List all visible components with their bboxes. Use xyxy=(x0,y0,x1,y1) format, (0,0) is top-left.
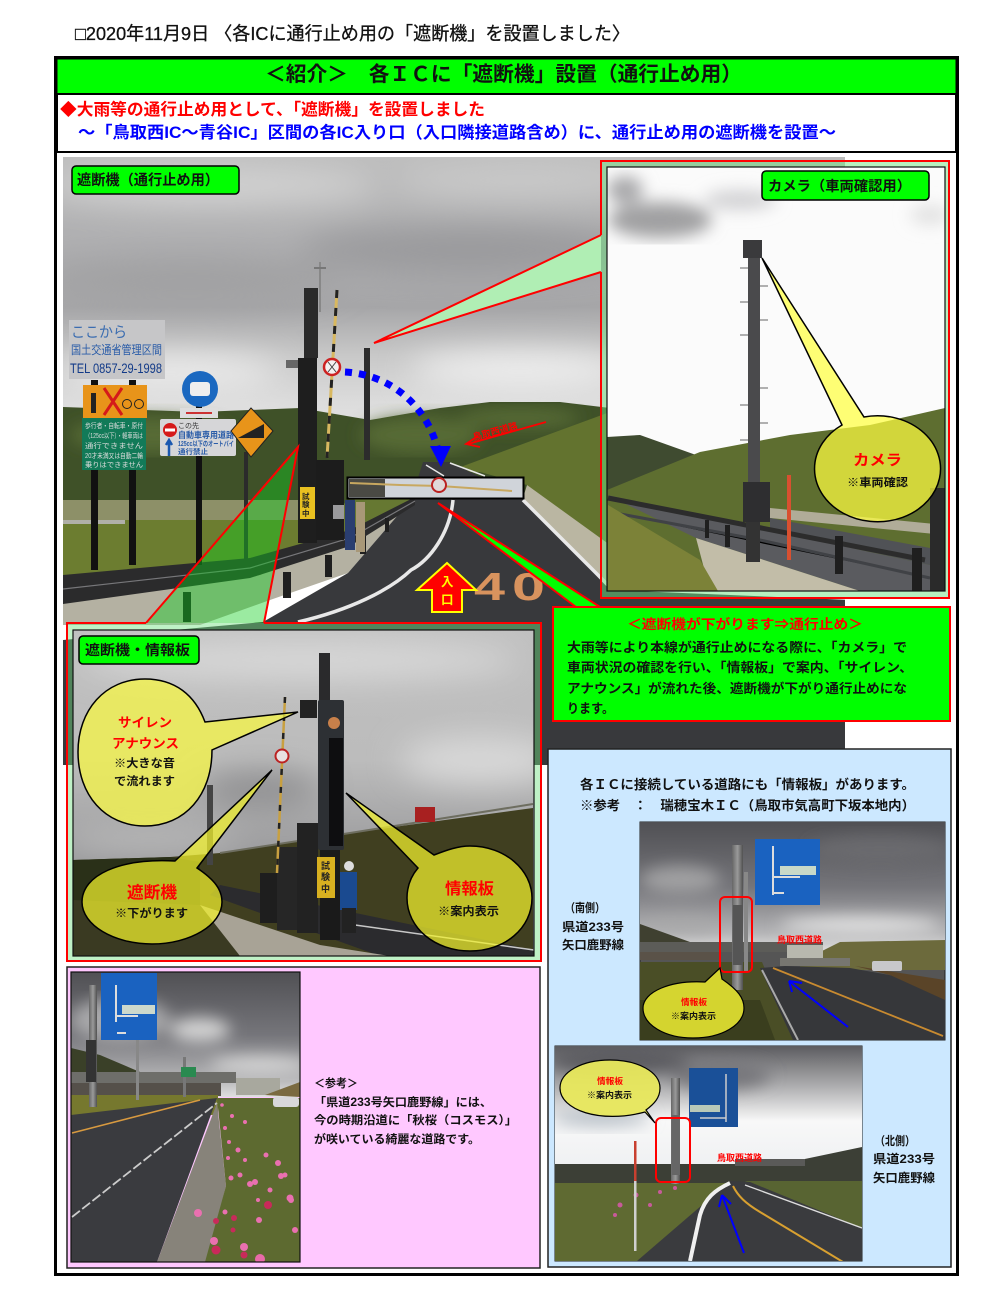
barrier photo: 験 xyxy=(321,871,330,882)
sign: no pedestrians or cycles: （125cc以下）・軽車両は xyxy=(85,431,143,440)
barrier pole: 中 xyxy=(302,508,310,518)
sign: no pedestrians or cycles: 乗りはできません xyxy=(85,460,143,469)
south label: 矢口鹿野線 xyxy=(562,937,624,952)
connector wedge: to explanation xyxy=(438,503,600,607)
north label: 矢口鹿野線 xyxy=(873,1170,935,1185)
entrance arrow: 口 xyxy=(441,593,454,607)
south label: 県道233号 xyxy=(562,919,624,934)
south callout: ※案内表示 xyxy=(671,1011,717,1021)
barrier pole xyxy=(286,262,370,552)
panel: explanation: アナウンス」が流れた後、遮断機が下がり通行止めにな xyxy=(567,681,907,696)
reference text xyxy=(314,1076,517,1146)
barrier photo: 中 xyxy=(321,883,330,894)
south photo xyxy=(640,822,950,1040)
north callout: 情報板 xyxy=(597,1076,623,1086)
sign: no pedestrians or cycles: 20才未満又は自動二輪 xyxy=(85,451,143,460)
panel: explanation: 車両状況の確認を行い、「情報板」で案内、「サイレン、 xyxy=(567,660,913,675)
camera callout: カメラ xyxy=(853,452,902,469)
road speed marking xyxy=(474,572,543,600)
blue dotted arc arrow xyxy=(345,372,451,467)
page heading: □2020年11月9日 〈各ICに通行止め用の「遮断機」を設置しました〉 xyxy=(75,23,630,44)
label: barrier xyxy=(72,166,239,194)
sign: motor vehicles only: 通行禁止 xyxy=(178,447,208,456)
road surface xyxy=(63,462,850,765)
panel: camera xyxy=(601,161,950,598)
title banner xyxy=(57,59,956,94)
sign: motor vehicles only: この先 xyxy=(178,421,199,430)
barrier photo: 試 xyxy=(321,861,330,871)
north callout xyxy=(560,1060,660,1123)
sign: motor vehicles only: 125cc以下のオートバイ xyxy=(178,440,234,448)
label: barrier: 遮断機（通行止め用） xyxy=(77,172,219,189)
pavement xyxy=(63,516,396,625)
callout: info board xyxy=(346,793,532,951)
callout: siren: アナウンス xyxy=(112,736,179,751)
sign: no pedestrians or cycles: 歩行者・自転車・原付 xyxy=(85,421,143,430)
north label xyxy=(873,1133,935,1185)
panel: connected roads: ※参考 ： 瑞穂宝木ＩＣ（鳥取市気高町下坂本地内） xyxy=(580,798,915,813)
hills xyxy=(63,402,610,510)
guard rail xyxy=(63,497,415,604)
sign: ここから: 国土交通省管理区間 xyxy=(71,342,162,357)
south photo: 鳥取西道路 xyxy=(777,934,822,945)
panel: reference, cosmos road xyxy=(67,967,540,1268)
connector wedge: to camera xyxy=(374,235,601,343)
sign: no pedestrians or cycles xyxy=(82,385,147,470)
title banner: ＜紹介＞ 各ＩＣに「遮断機」設置（通行止め用） xyxy=(265,62,742,86)
panel: explanation: 大雨等により本線が通行止めになる際に、「カメラ」で xyxy=(567,640,907,655)
south callout xyxy=(643,968,744,1038)
barrier pole: 験 xyxy=(302,499,310,509)
north label: （北側） xyxy=(875,1133,915,1148)
callout: info board: 情報板 xyxy=(445,879,494,898)
cosmos road photo xyxy=(70,972,310,1264)
north label: 県道233号 xyxy=(873,1151,935,1166)
label: camera: カメラ（車両確認用） xyxy=(768,178,911,194)
entrance arrow: 入 xyxy=(441,575,454,589)
callout: siren: サイレン xyxy=(118,715,172,730)
intro text xyxy=(57,94,956,152)
label: barrier and info board: 遮断機・情報板 xyxy=(85,642,190,658)
callout: info board: ※案内表示 xyxy=(438,904,499,918)
sign: motor vehicles only xyxy=(160,371,236,565)
sign: ここから: ここから xyxy=(71,324,127,341)
road speed marking: 0 xyxy=(512,566,545,609)
barrier pole: 試 xyxy=(302,492,310,501)
intro text: ◆大雨等の通行止め用として、「遮断機」を設置しました xyxy=(60,99,485,119)
inset: lowered barrier xyxy=(348,478,524,498)
reference text: 「県道233号矢口鹿野線」には、 xyxy=(314,1095,492,1109)
barrier photo xyxy=(60,630,560,956)
north callout: ※案内表示 xyxy=(587,1090,633,1100)
intro text: ～「鳥取西IC～青谷IC」区間の各IC入り口（入口隣接道路含め）に、通行止め用の遮断機を設置～ xyxy=(78,122,836,142)
panel: barrier and info board xyxy=(60,623,560,961)
callout: barrier: ※下がります xyxy=(115,906,188,920)
sign: motor vehicles only: 自動車専用道路 xyxy=(178,430,234,440)
arrow: road name label: 鳥取西道路 xyxy=(471,419,519,444)
label: barrier and info board xyxy=(79,636,199,664)
south label: （南側） xyxy=(565,900,605,915)
panel: connected roads: 各ＩＣに接続している道路にも「情報板」があります。 xyxy=(580,777,915,792)
panel: explanation: ります。 xyxy=(567,701,614,716)
sign: ここから xyxy=(69,320,165,570)
reference text: 今の時期沿道に「秋桜（コスモス）」 xyxy=(314,1113,517,1127)
sign: ここから: TEL 0857-29-1998 xyxy=(70,361,162,376)
north photo xyxy=(550,1046,862,1262)
callout: siren xyxy=(78,679,298,826)
camera callout: ※車両確認 xyxy=(847,475,908,489)
camera callout xyxy=(762,258,941,522)
label: camera xyxy=(762,171,929,200)
reference text: が咲いている綺麗な道路です。 xyxy=(314,1132,480,1146)
sign: no pedestrians or cycles: 通行できません xyxy=(85,441,143,450)
main photo: road with barrier xyxy=(40,157,850,765)
sign: slope warning xyxy=(231,408,273,562)
camera photo xyxy=(607,167,950,591)
arrow: road name label xyxy=(466,419,546,447)
south callout: 情報板 xyxy=(681,997,707,1007)
connector wedge: to barrier panel xyxy=(146,447,298,623)
callout: barrier: 遮断機 xyxy=(127,883,178,902)
callout: barrier xyxy=(82,770,272,944)
road speed marking: 4 xyxy=(474,566,505,609)
panel: explanation: ＜遮断機が下がります⇒通行止め＞ xyxy=(627,616,863,632)
south label xyxy=(562,900,624,952)
callout: siren: ※大きな音 xyxy=(114,756,175,770)
north photo: 鳥取西道路 xyxy=(717,1152,762,1163)
entrance arrow xyxy=(417,563,476,612)
callout: siren: で流れます xyxy=(114,774,175,788)
panel: connected roads xyxy=(548,749,951,1267)
panel: explanation xyxy=(553,607,950,721)
reference text: ＜参考＞ xyxy=(314,1076,358,1090)
